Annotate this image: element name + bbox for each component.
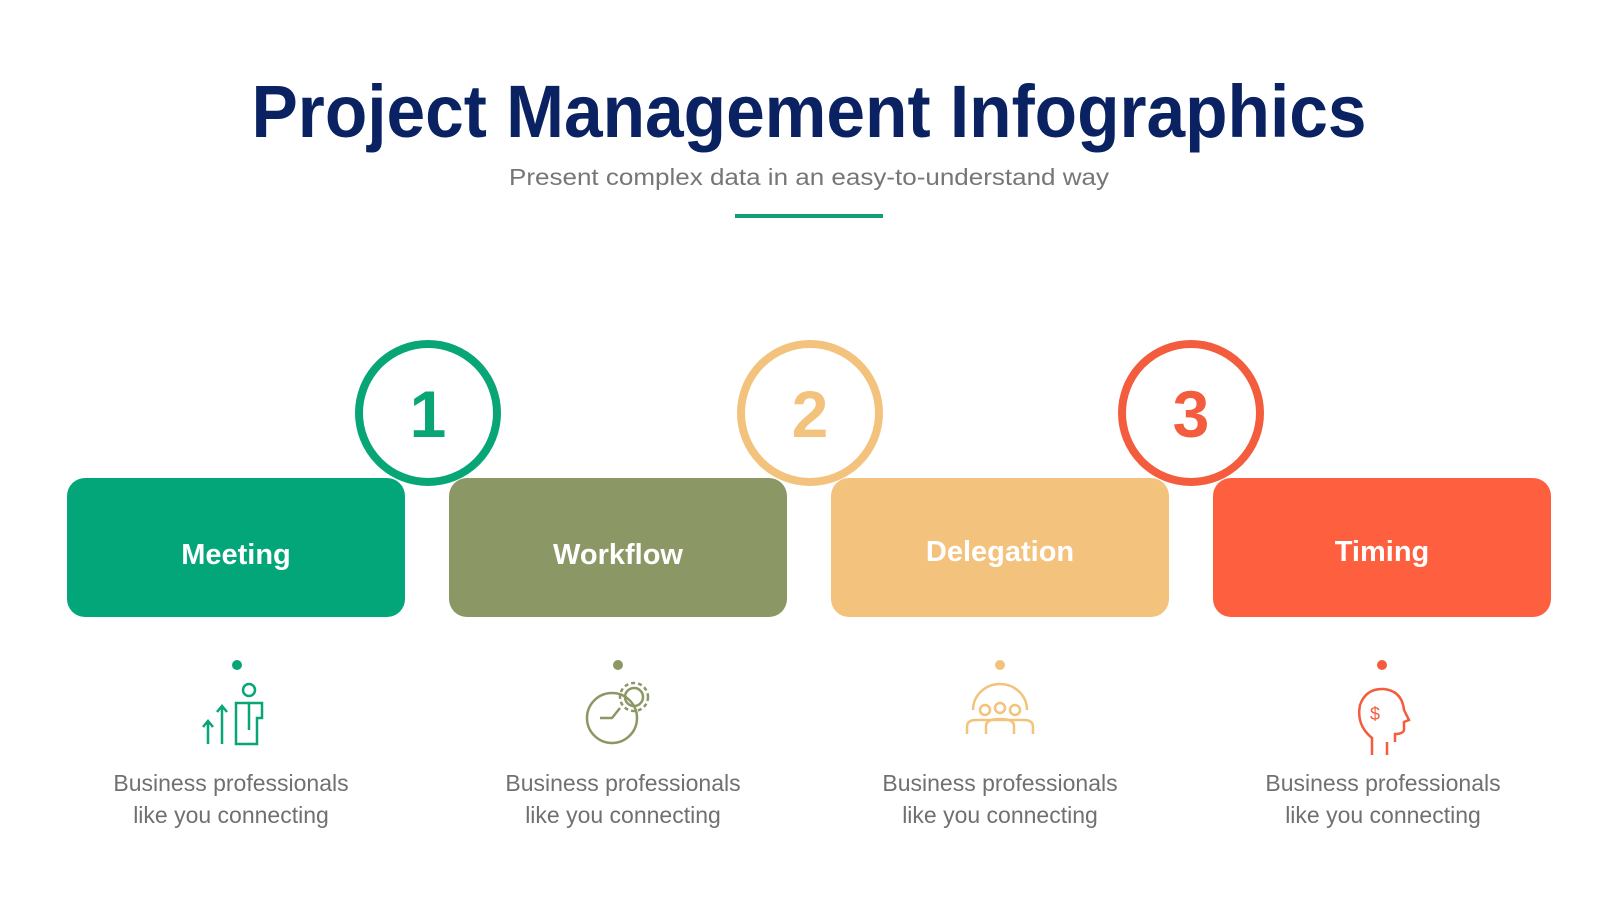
circle 2 xyxy=(741,344,879,482)
text 3 xyxy=(882,770,1118,828)
icon: growth person xyxy=(203,660,262,744)
text 2: Business professionals xyxy=(505,770,741,796)
text 1: Business professionals xyxy=(113,770,349,796)
text 3: like you connecting xyxy=(902,802,1098,828)
text 4: like you connecting xyxy=(1285,802,1481,828)
box: Delegation xyxy=(831,478,1169,617)
circle 3 xyxy=(1122,344,1260,482)
box: Meeting xyxy=(67,478,405,617)
box: Timing xyxy=(1213,478,1551,617)
box: Workflow: Workflow xyxy=(553,539,683,571)
text 1 xyxy=(113,770,349,828)
text 3: Business professionals xyxy=(882,770,1118,796)
text 2: like you connecting xyxy=(525,802,721,828)
title: Project Management Infographics xyxy=(252,70,1366,153)
circle 1: 1 xyxy=(410,377,446,451)
icon: money head: $ xyxy=(1370,704,1380,724)
box: Delegation: Delegation xyxy=(926,536,1074,568)
icon: gear clock xyxy=(587,660,648,743)
icon: money head xyxy=(1359,660,1409,755)
box: Meeting: Meeting xyxy=(181,539,291,571)
subtitle: Present complex data in an easy-to-understand way xyxy=(509,164,1110,190)
text 2 xyxy=(505,770,741,828)
text 4 xyxy=(1265,770,1501,828)
circle 3: 3 xyxy=(1173,377,1209,451)
box: Timing: Timing xyxy=(1335,536,1429,568)
icon: team xyxy=(967,660,1033,734)
circle 1 xyxy=(359,344,497,482)
circle 2: 2 xyxy=(792,377,828,451)
text 4: Business professionals xyxy=(1265,770,1501,796)
text 1: like you connecting xyxy=(133,802,329,828)
box: Workflow xyxy=(449,478,787,617)
